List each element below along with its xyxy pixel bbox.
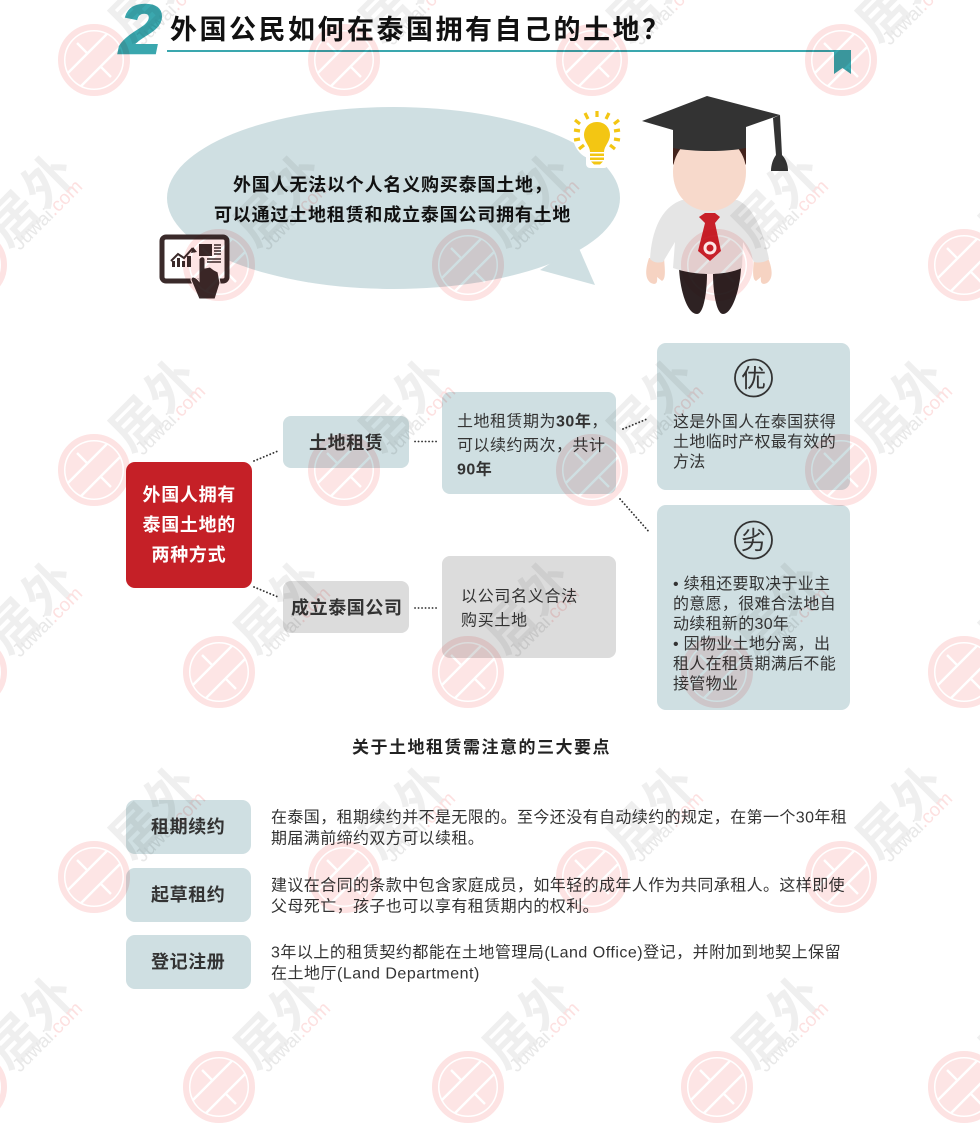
row: renewal: 期届满前缔约双方可以续租。 [271,830,484,848]
watermarks: 外 [509,144,583,218]
watermarks: 居 [349,794,423,868]
watermarks: 外 [135,756,209,830]
watermarks: 居 [846,387,920,461]
watermarks: 居 [99,387,173,461]
watermarks: 外 [385,756,459,830]
watermarks: Juwai.com [506,176,584,255]
row: renewal: 租期续约 [151,817,225,837]
watermarks: Juwai.com [9,998,87,1077]
watermarks: 居 [597,387,671,461]
cap [642,96,780,151]
bubble text [214,175,571,225]
box: company [283,581,409,633]
icon: tablet with hand [162,237,227,299]
tassel [771,115,788,171]
icon: light bulb [573,111,621,168]
watermarks: Juwai.com [879,788,957,867]
row: drafting: 父母死亡，孩子也可以享有租赁期内的权利。 [271,898,599,916]
connector lines [254,419,650,608]
watermarks: Juwai.com [9,583,87,662]
bubble text: 外国人无法以个人名义购买泰国土地， [233,175,553,195]
watermarks: 外 [385,349,459,423]
watermarks: Juwai.com [132,381,210,460]
watermarks: Juwai.com [755,176,833,255]
disadvantage text [673,575,836,693]
icon: advantage badge [735,360,772,396]
ribbon and rule [167,50,851,74]
tie [698,213,721,261]
legs [679,268,707,314]
icon: disadvantage badge: 劣 [741,527,766,555]
face [673,148,746,211]
watermarks: 居 [722,589,796,663]
watermarks: Juwai.com [755,998,833,1077]
row: drafting: 起草租约 [151,885,225,905]
panel: disadvantage [657,505,850,710]
watermarks: Juwai.com [132,788,210,867]
watermarks: 外 [758,144,832,218]
hair [673,148,746,165]
panel: advantage [657,343,850,490]
watermarks: 居 [597,794,671,868]
row: registration [126,935,841,989]
watermarks: 外 [260,551,334,625]
watermarks: 居 [473,1004,547,1078]
watermarks: 外 [633,349,707,423]
root box: 两种方式 [152,544,226,565]
watermarks: 外 [509,551,583,625]
disadvantage text: 动续租新的30年 [673,615,789,633]
box: lease detail: 土地租赁期为30年， [457,412,608,430]
advantage text [673,413,836,471]
icon: advantage badge: 优 [741,365,766,393]
watermarks: Juwai.com [506,998,584,1077]
root box [126,462,252,588]
watermarks: 外 [882,349,956,423]
watermarks: 居 [473,589,547,663]
watermarks: 外 [633,756,707,830]
watermarks: Juwai.com [506,583,584,662]
row: renewal: 在泰国，租期续约并不是无限的。至今还没有自动续约的规定，在第一个30年租 [271,808,847,826]
icon: disadvantage badge [735,522,772,558]
watermarks: 居 [224,1004,298,1078]
shirt [650,200,769,274]
watermarks: 外 [882,756,956,830]
watermarks: 外 [260,144,334,218]
box: lease detail [442,392,616,494]
watermarks: 外 [509,966,583,1040]
box: company: 成立泰国公司 [291,597,403,618]
box: land lease [283,416,409,468]
box: company detail: 购买土地 [461,612,528,630]
row: registration: 登记注册 [151,952,225,972]
row: renewal [126,800,847,854]
watermarks: 居 [349,387,423,461]
watermarks: 居 [473,182,547,256]
disadvantage text: 接管物业 [673,675,738,693]
watermarks: Juwai.com [879,381,957,460]
speech bubble [167,107,620,289]
disadvantage text: 的意愿，很难合法地自 [673,594,836,613]
watermarks: 居 [99,794,173,868]
watermarks: 外 [12,966,86,1040]
box: land lease: 土地租赁 [309,433,383,453]
watermarks: 外 [758,551,832,625]
root box: 泰国土地的 [142,515,236,535]
advantage text: 这是外国人在泰国获得 [673,413,836,431]
watermarks: Juwai.com [9,176,87,255]
watermarks: Juwai.com [630,381,708,460]
watermarks: Juwai.com [257,176,335,255]
box: lease detail: 可以续约两次，共计 [457,436,606,454]
advantage text: 土地临时产权最有效的 [673,433,836,451]
disadvantage text: 租人在租赁期满后不能 [673,655,836,673]
watermarks: 居 [722,1004,796,1078]
watermarks: 外 [758,966,832,1040]
row: drafting: 建议在合同的条款中包含家庭成员，如年轻的成年人作为共同承租人。这样即使 [271,876,845,894]
hands [646,258,665,284]
disadvantage text: • 因物业土地分离，出 [673,635,830,653]
watermarks: Juwai.com [257,998,335,1077]
heading text: 外国公民如何在泰国拥有自己的土地？ [170,15,672,45]
root box: 外国人拥有 [142,485,236,505]
watermarks: 外 [260,966,334,1040]
box: company detail: 以公司名义合法 [461,588,578,606]
subheading: 关于土地租赁需注意的三大要点 [352,737,611,757]
watermarks: Juwai.com [257,583,335,662]
watermarks: 居 [722,182,796,256]
watermarks: Juwai.com [382,788,460,867]
watermarks: Juwai.com [630,788,708,867]
watermarks: 外 [135,349,209,423]
box: lease detail: 90年 [457,460,492,478]
watermarks: 居 [224,182,298,256]
row: registration: 在土地厅(Land Department) [271,964,480,982]
advantage text: 方法 [673,453,706,471]
character: graduate [642,96,788,314]
row: drafting [126,868,845,922]
watermarks: Juwai.com [755,583,833,662]
watermarks: 居 [846,794,920,868]
watermarks: 外 [12,551,86,625]
disadvantage text: • 续租还要取决于业主 [673,575,830,593]
title [118,0,851,74]
watermarks: 居 [224,589,298,663]
row: registration: 3年以上的租赁契约都能在土地管理局(Land Office)登记，并附加到地契上保留 [271,944,841,962]
watermarks: 外 [12,144,86,218]
box: company detail [442,556,616,658]
watermarks: Juwai.com [382,381,460,460]
bubble text: 可以通过土地租赁和成立泰国公司拥有土地 [214,204,571,225]
